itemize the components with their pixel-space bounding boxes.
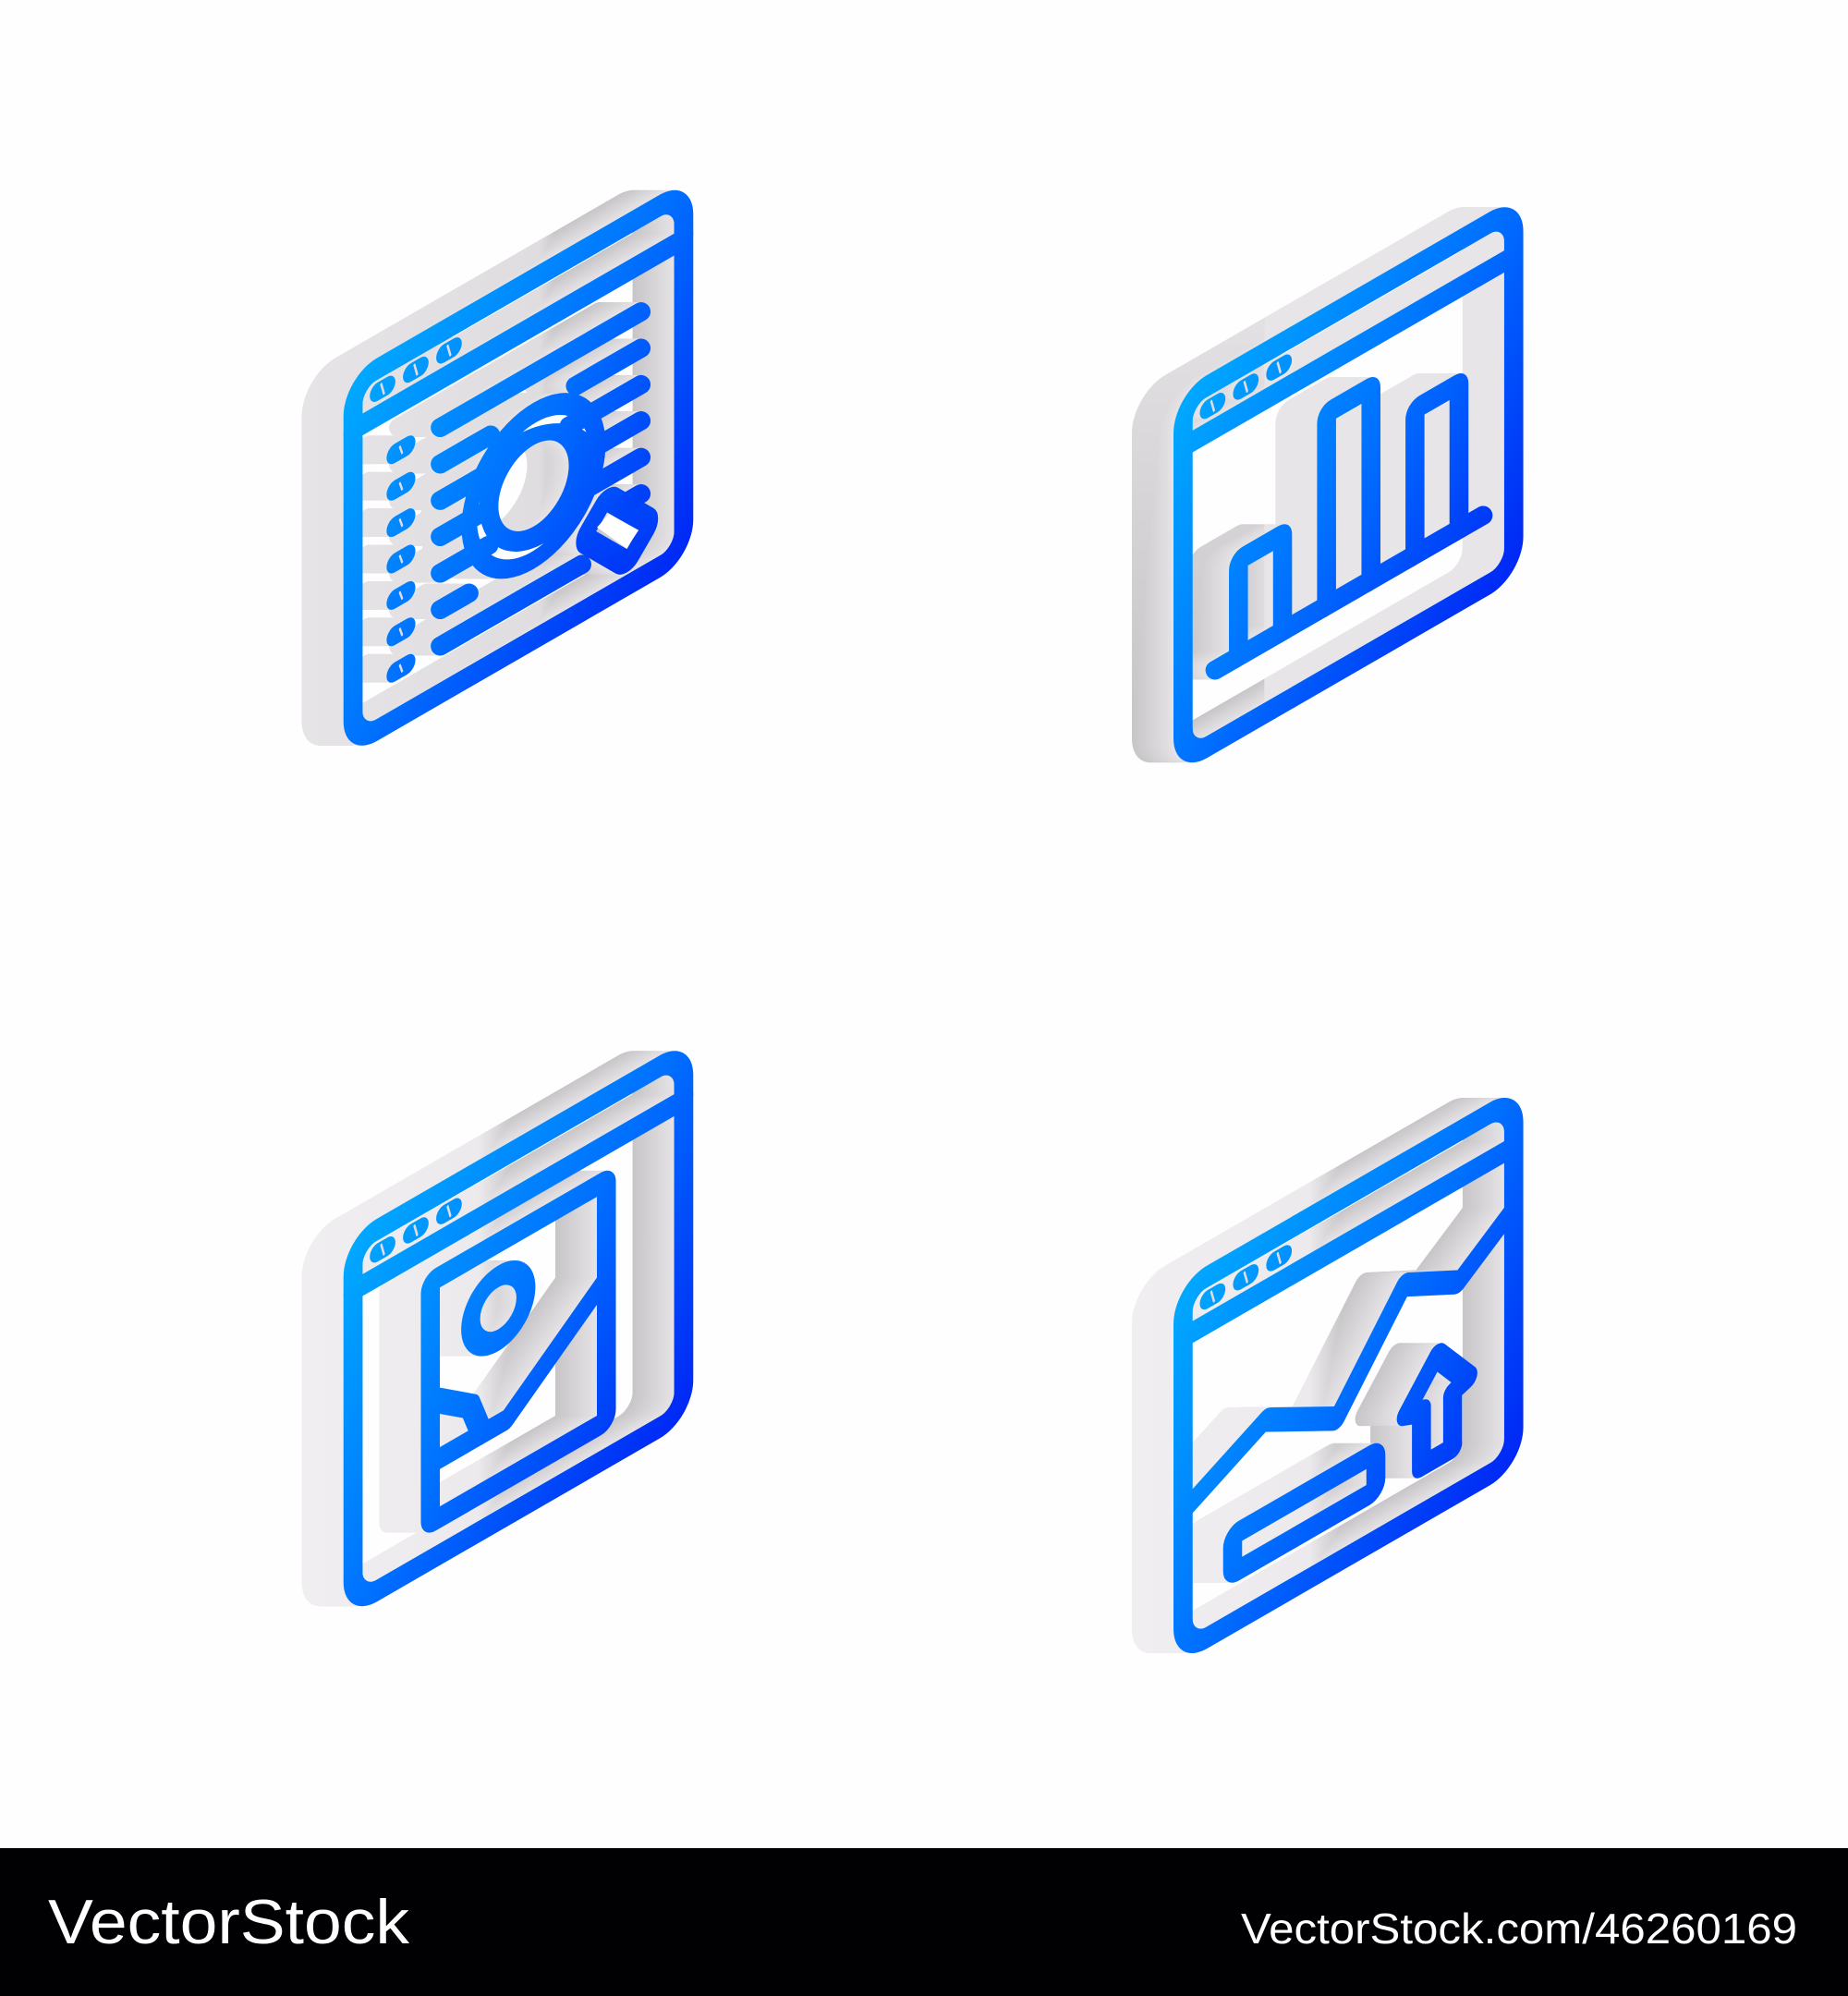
browser window frame [1183,1100,1514,1651]
browser frame, list bullets and magnifying glass [353,192,684,744]
window button highlights [1211,1252,1281,1303]
isometric grey extrusion: bar chart icon [1125,192,1532,765]
isometric grey extrusion: picture icon [296,1045,702,1618]
blue outline: bar chart icon [1183,209,1514,761]
icon: browser window with rising graph and arrow [1125,1092,1532,1665]
isometric grey extrusion: search icon [296,185,702,758]
icon: browser window with magnifying glass over text list [296,185,702,758]
icon: browser window with picture [296,1045,702,1618]
window button highlights [382,1205,450,1256]
blue outline: picture icon [353,1053,684,1604]
icon: browser window with bar chart [1125,192,1532,765]
blue outline: growth icon [1183,1100,1514,1651]
chart baseline [1215,516,1483,670]
picture with sun and mountains [431,1180,606,1523]
browser window frame [353,1053,684,1604]
footer bar [0,1848,1848,1996]
footer image id text: VectorStock.com/46260169 [1241,1905,1797,1953]
text lines [440,311,641,646]
line graph, text bar and up arrow [1183,1209,1514,1604]
footer logo text: VectorStock [48,1887,410,1957]
blue outline: search icon [353,192,684,744]
isometric grey extrusion: growth icon [1125,1092,1532,1665]
browser frame and bars [1183,209,1514,761]
